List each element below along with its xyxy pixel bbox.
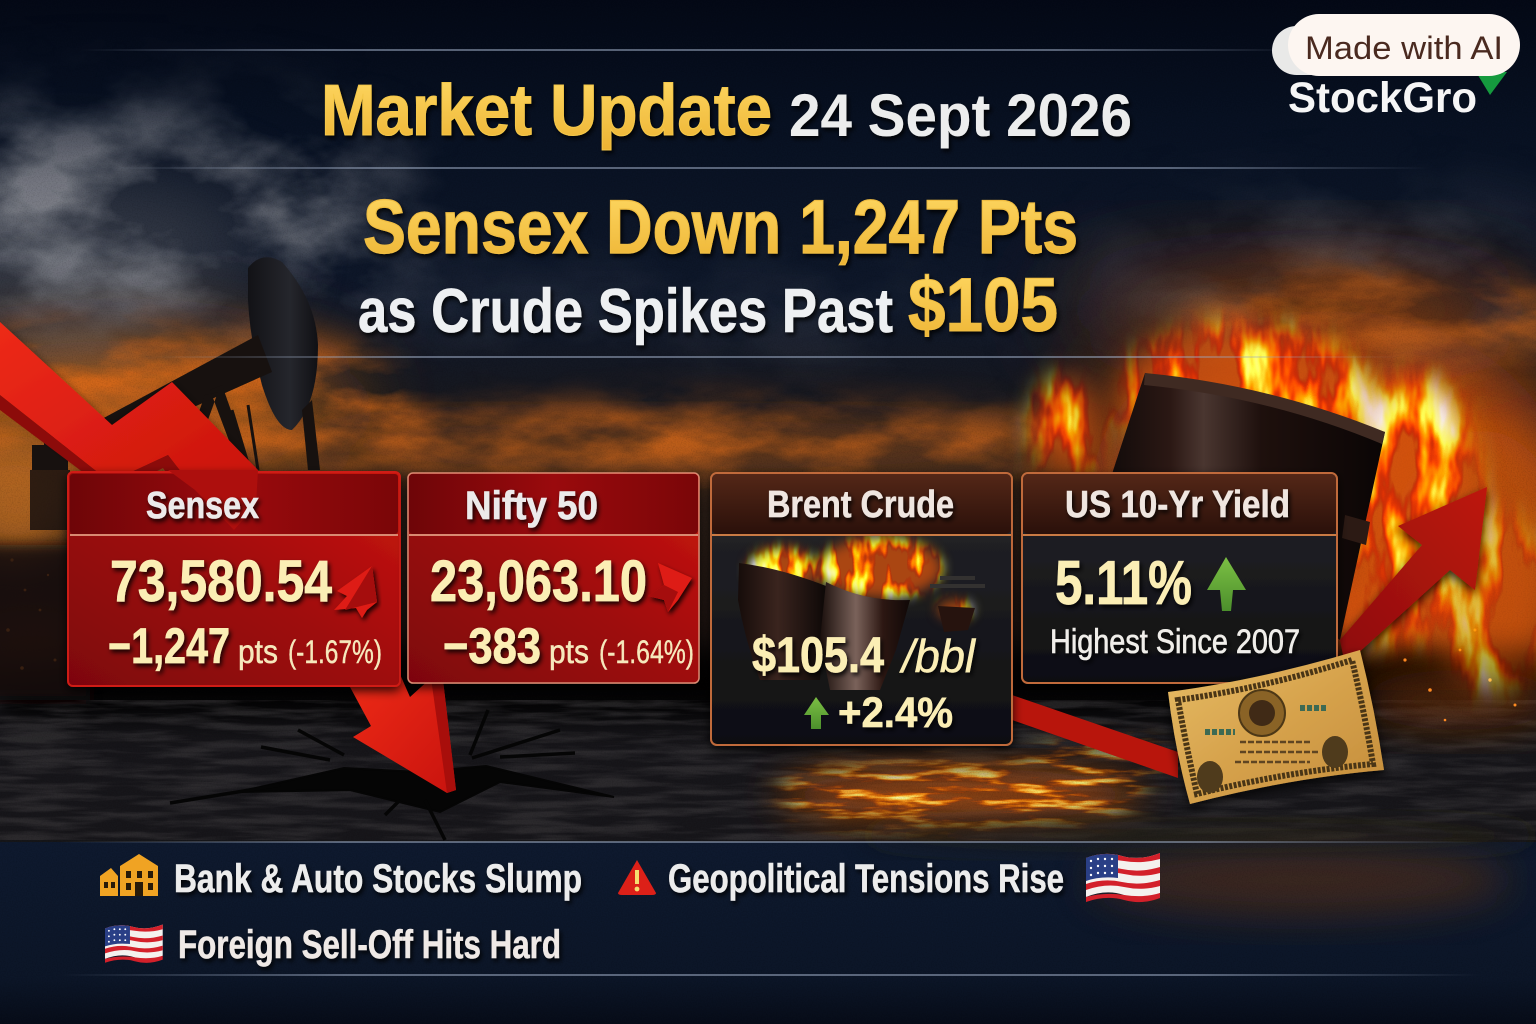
label: pts: pts xyxy=(549,633,589,670)
value: Nifty level: 23,063.10 xyxy=(430,549,647,614)
value: Nifty change: −383 xyxy=(443,618,541,674)
icon: buildings xyxy=(100,854,158,896)
footer item: foreign sell-off: Foreign Sell-Off Hits Hard xyxy=(178,923,561,967)
footer item: geopolitical tensions: Geopolitical Tensions Rise xyxy=(668,857,1064,901)
label: per barrel: /bbl xyxy=(899,630,977,682)
big burning barrel xyxy=(1000,290,1536,720)
heading: Sensex: Sensex xyxy=(146,485,259,527)
barrel flames xyxy=(1000,290,1536,720)
icon: US flag xyxy=(1086,853,1160,902)
badge: Made with AI xyxy=(1272,14,1520,76)
icon: US flag small xyxy=(105,925,163,963)
icon: green up arrow xyxy=(804,697,829,729)
value: Brent price: $105.4 xyxy=(752,627,884,683)
footer item: foreign sell-off xyxy=(105,923,561,967)
heading: Nifty 50: Nifty 50 xyxy=(465,484,598,528)
illustration: burning barrels xyxy=(730,536,990,690)
label: pts: pts xyxy=(238,633,278,670)
heading: US 10-Yr Yield: US 10-Yr Yield xyxy=(1065,484,1290,526)
label: percent: (-1.64%) xyxy=(599,634,694,670)
ground crack and red arrow head xyxy=(170,672,614,840)
refinery shadow xyxy=(0,545,90,700)
value: Brent change: +2.4% xyxy=(838,689,953,737)
logo: StockGro: StockGro xyxy=(1288,74,1477,122)
icon: red down arrow xyxy=(648,563,692,612)
value: Sensex change: −1,247 xyxy=(108,618,230,674)
panel: Brent Crude xyxy=(711,473,1012,745)
value: yield: 5.11% xyxy=(1055,549,1192,618)
icon: green up arrow xyxy=(1207,557,1246,611)
note: highest since 2007: Highest Since 2007 xyxy=(1050,623,1300,661)
crack xyxy=(170,710,614,840)
red arrow overlap on header xyxy=(168,470,258,530)
logo triangle xyxy=(1476,72,1507,95)
panel: Sensex xyxy=(68,470,400,686)
panel: US 10-Yr Yield xyxy=(1022,473,1337,683)
illustration: dollar banknote xyxy=(1168,650,1384,804)
icon: red down arrow xyxy=(334,566,377,618)
headline: Sensex Down 1,247 Pts: Sensex Down 1,247 Pts xyxy=(363,185,1078,270)
big red zigzag arrow xyxy=(0,322,258,494)
heading: Brent Crude: Brent Crude xyxy=(767,484,954,526)
title: Market Update: Market Update xyxy=(321,71,772,151)
headline: as Crude Spikes Past: as Crude Spikes Past xyxy=(358,277,893,346)
oil pump jack silhouette xyxy=(30,257,320,530)
value: Sensex level: 73,580.54 xyxy=(110,549,332,614)
icon: warning xyxy=(618,860,656,895)
red arrow segment under panels xyxy=(1012,695,1178,778)
red arrow rising right xyxy=(1340,487,1487,665)
date: 24 Sept 2026: 24 Sept 2026 xyxy=(789,82,1132,149)
panel: Nifty 50 xyxy=(408,473,699,683)
footer item: bank and auto xyxy=(100,854,582,901)
badge: Made with AI: Made with AI xyxy=(1305,30,1503,66)
footer item: bank and auto: Bank & Auto Stocks Slump xyxy=(174,857,582,901)
background scene xyxy=(0,70,1536,842)
headline: $105: $105 xyxy=(908,263,1058,348)
label: percent: (-1.67%) xyxy=(288,634,382,670)
sparks xyxy=(6,558,1517,721)
